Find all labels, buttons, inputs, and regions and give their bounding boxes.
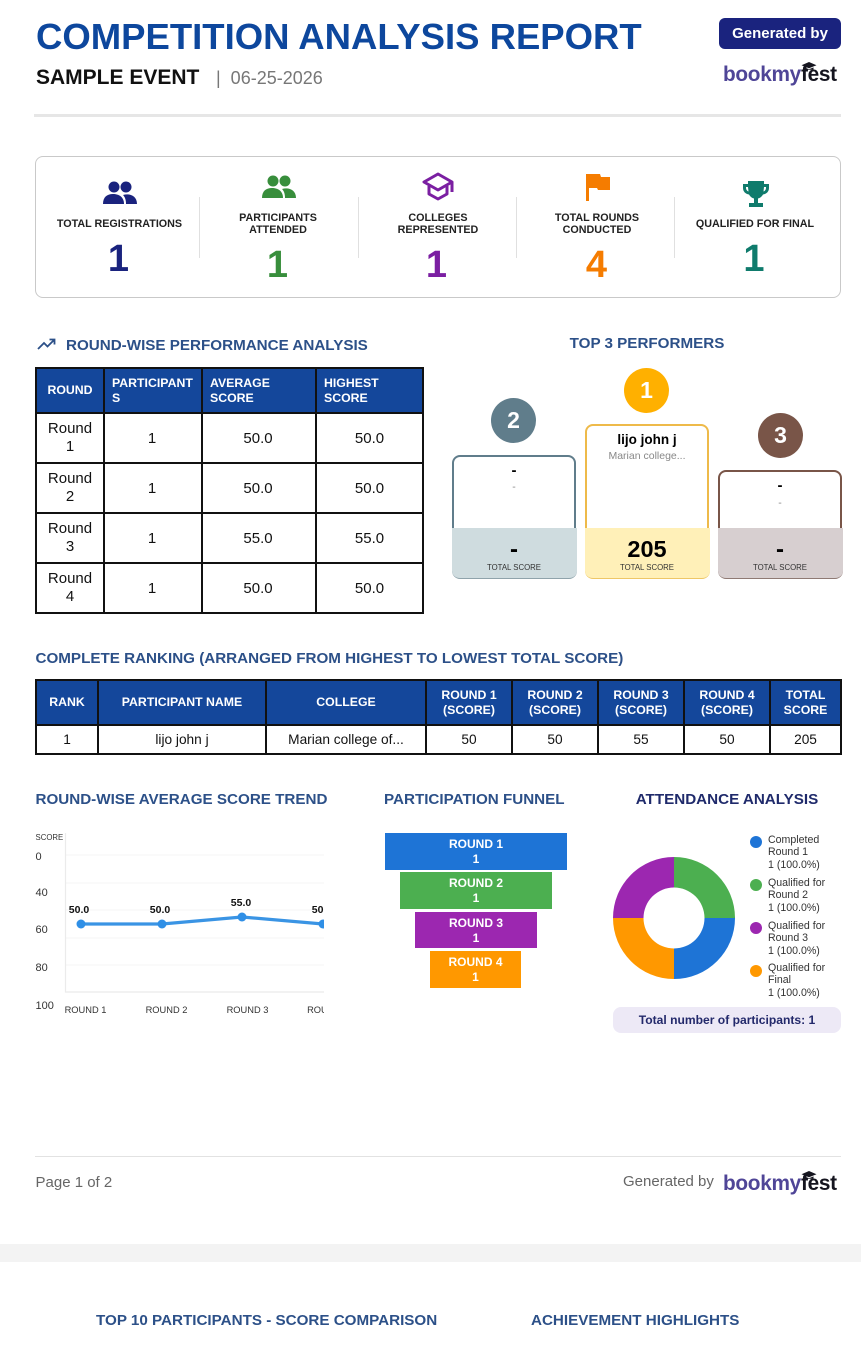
stat label: total rounds conducted: TOTAL ROUNDS	[555, 212, 639, 224]
score footer: -	[510, 536, 518, 562]
table: complete ranking: ROUND 3	[613, 688, 669, 702]
line chart: average score trend: ROUND 3	[227, 1005, 268, 1015]
stat value: total registrations: 1	[108, 238, 129, 280]
legend item: qualified for round 2: 1 (100.0%)	[768, 902, 820, 914]
funnel step: round 1: 1	[473, 852, 479, 866]
table: round-wise performance: SCORE	[324, 390, 368, 404]
panel: key statistics	[35, 156, 841, 298]
table: round-wise performance: S	[112, 390, 120, 404]
heading: achievement highlights: ACHIEVEMENT HIGHLIGHTS	[531, 1312, 739, 1329]
table: complete ranking: 50	[719, 732, 735, 747]
legend item: qualified for round 2	[750, 877, 825, 914]
stat label: total registrations: TOTAL REGISTRATIONS	[57, 218, 182, 230]
table: round-wise performance: AVERAGE	[210, 376, 270, 390]
logo: bookmyfest: bookmyfest	[723, 1172, 837, 1195]
heading: round-wise performance: ROUND-WISE PERFORMANCE ANALYSIS	[66, 337, 368, 354]
funnel step: round 1: ROUND 1	[449, 837, 503, 851]
table: complete ranking	[35, 679, 842, 755]
stat label: qualified for final: QUALIFIED FOR FINAL	[696, 218, 814, 230]
table: round-wise performance: 50.0	[243, 430, 273, 446]
stat label: colleges represented: COLLEGES	[408, 212, 468, 224]
table: complete ranking: ROUND 2	[527, 688, 583, 702]
table: round-wise performance: 1	[148, 480, 156, 496]
title: COMPETITION ANALYSIS REPORT	[36, 16, 642, 57]
table: round-wise performance: PARTICIPANT	[112, 376, 193, 390]
stat label: participants attended	[239, 212, 317, 236]
icon: flag	[586, 174, 610, 201]
line chart: average score trend: 100	[36, 1000, 54, 1012]
table: complete ranking: lijo john j	[155, 732, 209, 747]
icon: graduation cap	[422, 172, 454, 200]
score footer: TOTAL SCORE	[753, 562, 807, 572]
performer name: -	[778, 477, 782, 494]
table: round-wise performance: 50.0	[243, 580, 273, 596]
line chart: average score trend: 50.0	[150, 904, 170, 916]
table: complete ranking: TOTAL	[786, 688, 825, 702]
performer college: -	[778, 497, 782, 509]
legend item: qualified for final	[750, 962, 825, 999]
table: round-wise performance: 1	[148, 580, 156, 596]
page separator band	[0, 1244, 861, 1262]
funnel step: round 4	[430, 951, 521, 988]
funnel step: round 4: ROUND 4	[448, 955, 502, 969]
performer college: -	[512, 481, 516, 493]
table: round-wise performance: 50.0	[355, 480, 384, 496]
table: complete ranking: 1	[63, 732, 71, 747]
card: rank 2 performer	[452, 455, 576, 578]
stat value: colleges represented: 1	[426, 244, 447, 286]
line chart: average score trend: ROUND 1	[65, 1005, 106, 1015]
heading: complete ranking: COMPLETE RANKING (ARRANGED FROM HIGHEST TO LOWEST TOTAL SCORE)	[36, 650, 623, 667]
legend item: qualified for round 3: Qualified for	[768, 920, 825, 932]
funnel step: round 2: ROUND 2	[449, 876, 503, 890]
badge: rank 3: 3	[774, 422, 787, 448]
stat label: colleges represented: REPRESENTED	[398, 224, 478, 236]
table: round-wise performance: 50.0	[243, 480, 273, 496]
footer	[35, 1156, 841, 1201]
table: round-wise performance: 4	[66, 588, 74, 605]
funnel step: round 3	[415, 912, 537, 948]
badge: rank 2	[491, 398, 536, 443]
legend item: completed round 1: Completed	[768, 834, 819, 846]
score footer: TOTAL SCORE	[620, 562, 674, 572]
generated by badge: Generated by	[732, 25, 828, 42]
stat value: total rounds conducted: 4	[586, 244, 607, 286]
legend item: qualified for round 3: Round 3	[768, 932, 808, 944]
icon: trend arrow	[37, 338, 56, 350]
line chart: average score trend: ROUND 2	[146, 1005, 187, 1015]
table: complete ranking: 50	[461, 732, 477, 747]
table: round-wise performance: 1	[148, 530, 156, 546]
card: rank 1 performer	[585, 424, 709, 578]
table: round-wise performance: 1	[66, 438, 74, 455]
legend: attendance	[750, 834, 825, 999]
funnel step: round 3: ROUND 3	[449, 916, 503, 930]
icon: graduation cap	[802, 1171, 816, 1179]
score footer: -	[776, 536, 784, 562]
funnel chart	[385, 833, 567, 988]
card: rank 3 performer	[718, 470, 842, 578]
stat label: participants attended: PARTICIPANTS	[239, 212, 317, 224]
stat label: total rounds conducted	[555, 212, 639, 236]
heading: top 10 participants: TOP 10 PARTICIPANTS - SCORE COMPARISON	[96, 1312, 437, 1329]
table: complete ranking: COLLEGE	[316, 695, 376, 709]
legend item: qualified for round 2: Qualified for	[768, 877, 825, 889]
heading: score trend: ROUND-WISE AVERAGE SCORE TREND	[36, 791, 327, 808]
line chart: average score trend	[36, 833, 324, 1015]
badge: rank 1: 1	[640, 377, 653, 403]
line chart: average score trend: 80	[36, 962, 48, 974]
callout: total participants	[613, 1007, 841, 1033]
table: complete ranking: RANK	[49, 695, 85, 709]
line chart: average score trend: 55.0	[231, 897, 251, 909]
table: round-wise performance: 55.0	[355, 530, 384, 546]
table: round-wise performance: Round	[48, 570, 92, 587]
heading: attendance analysis: ATTENDANCE ANALYSIS	[636, 791, 818, 808]
table: round-wise performance: 2	[66, 488, 74, 505]
badge: rank 1	[624, 368, 669, 413]
performer name: -	[512, 462, 516, 479]
table: round-wise performance: Round	[48, 520, 92, 537]
table: complete ranking: ROUND 4	[699, 688, 755, 702]
page number: Page 1 of 2	[36, 1174, 112, 1190]
heading: top 3 performers: TOP 3 PERFORMERS	[570, 335, 724, 352]
score footer: TOTAL SCORE	[487, 562, 541, 572]
legend item: qualified for final: Final	[768, 974, 791, 986]
table: round-wise performance: ROUND	[47, 383, 93, 397]
legend item: completed round 1: Round 1	[768, 846, 808, 858]
score footer	[584, 528, 710, 578]
table: round-wise performance: Round	[48, 420, 92, 437]
generated by badge	[719, 18, 841, 49]
table: complete ranking: ROUND 1	[441, 688, 497, 702]
generated by text: Generated by	[623, 1173, 714, 1190]
funnel step: round 3: 1	[473, 930, 479, 944]
stat value: participants attended: 1	[267, 244, 288, 286]
funnel step: round 1	[385, 833, 567, 870]
performer college: Marian college...	[608, 450, 686, 462]
legend item: completed round 1: 1 (100.0%)	[768, 859, 820, 871]
funnel step: round 4: 1	[472, 970, 479, 984]
funnel step: round 2	[400, 872, 552, 909]
score footer	[718, 528, 842, 578]
table: round-wise performance: 55.0	[243, 530, 273, 546]
table: complete ranking: PARTICIPANT NAME	[122, 695, 242, 709]
icon: trophy	[743, 181, 769, 207]
stat label: total rounds conducted: CONDUCTED	[563, 224, 631, 236]
table: complete ranking: (SCORE)	[615, 702, 667, 716]
line chart: average score trend: 0	[36, 851, 42, 863]
line chart: average score trend: 60	[36, 924, 48, 936]
score footer	[452, 528, 576, 578]
funnel step: round 2: 1	[473, 890, 479, 904]
table: complete ranking: (SCORE)	[701, 702, 753, 716]
stat label: colleges represented	[398, 212, 478, 236]
table: round-wise performance: 1	[148, 430, 156, 446]
legend item: qualified for round 2: Round 2	[768, 889, 808, 901]
stat label: participants attended: ATTENDED	[249, 224, 307, 236]
legend item: qualified for round 3: 1 (100.0%)	[768, 945, 820, 957]
table: round-wise performance: HIGHEST	[324, 376, 379, 390]
table: round-wise performance: SCORE	[210, 390, 254, 404]
table: round-wise performance: Round	[48, 470, 92, 487]
header	[34, 16, 841, 117]
table: round-wise performance: 50.0	[355, 580, 384, 596]
table: complete ranking: 50	[547, 732, 563, 747]
icon: registrations people	[103, 182, 137, 204]
donut chart: attendance	[613, 857, 735, 979]
performer name: lijo john j	[617, 432, 677, 447]
badge: rank 3	[758, 413, 803, 458]
table: round-wise performance: 3	[66, 538, 74, 555]
legend item: qualified for round 3	[750, 920, 825, 957]
table: round-wise performance	[35, 367, 424, 614]
logo: bookmyfest: bookmyfest	[723, 63, 837, 86]
table: complete ranking: Marian college of...	[288, 732, 404, 747]
stat value: qualified for final: 1	[743, 238, 765, 280]
legend item: completed round 1	[750, 834, 820, 871]
table: round-wise performance: 50.0	[355, 430, 384, 446]
legend item: qualified for final: Qualified for	[768, 962, 825, 974]
event name: SAMPLE EVENT	[36, 66, 199, 89]
table: complete ranking: SCORE	[784, 702, 827, 716]
icon: graduation cap	[802, 62, 816, 70]
table: complete ranking: 205	[794, 732, 817, 747]
badge: rank 2: 2	[507, 407, 520, 433]
divider	[34, 114, 841, 117]
callout: total participants: Total number of participants: 1	[639, 1013, 815, 1027]
event date: | 06-25-2026	[216, 68, 323, 88]
table: complete ranking: (SCORE)	[443, 702, 495, 716]
line chart: average score trend: SCORE	[36, 833, 63, 842]
icon: attended people	[262, 176, 296, 198]
line chart: average score trend: 40	[36, 887, 48, 899]
heading: participation funnel: PARTICIPATION FUNNEL	[384, 791, 565, 808]
legend item: qualified for final: 1 (100.0%)	[768, 987, 820, 999]
table: complete ranking: (SCORE)	[529, 702, 581, 716]
table: complete ranking: 55	[633, 732, 649, 747]
line chart: average score trend: 50.0	[69, 904, 89, 916]
score footer: 205	[627, 536, 667, 562]
